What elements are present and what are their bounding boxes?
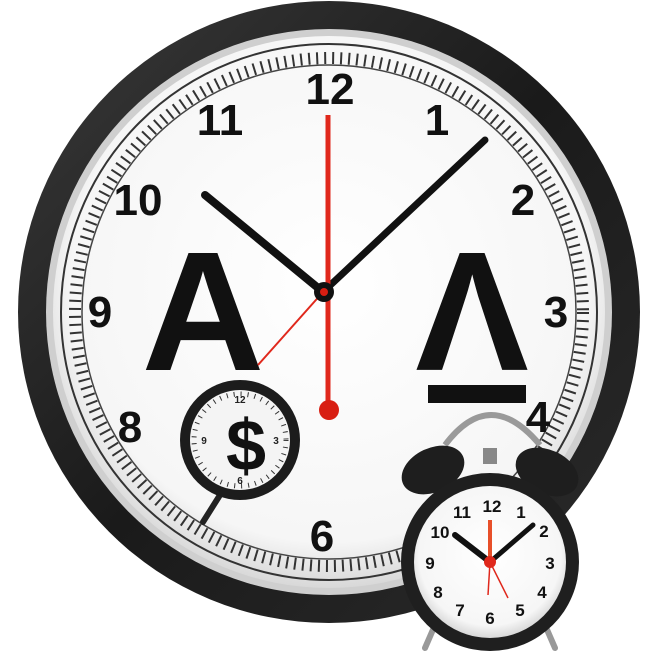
letter A: A bbox=[142, 217, 264, 407]
alarm clock bbox=[394, 415, 586, 651]
body bbox=[401, 473, 579, 651]
legs bbox=[425, 625, 435, 648]
alarm clock: 9 bbox=[425, 554, 435, 573]
small dollar clock: 6 bbox=[237, 476, 243, 487]
hour numerals bbox=[88, 65, 568, 561]
hour numerals: 6 bbox=[310, 512, 334, 561]
alarm clock: 6 bbox=[485, 609, 495, 628]
dollar sign: $ bbox=[226, 406, 266, 486]
handle bbox=[203, 495, 220, 522]
alarm clock: 12 bbox=[483, 497, 501, 516]
minute hand bbox=[323, 140, 485, 292]
hour numerals: 10 bbox=[114, 176, 162, 225]
alarm clock: 5 bbox=[515, 601, 525, 620]
hour numerals: 3 bbox=[544, 288, 568, 337]
hour numerals: 11 bbox=[197, 96, 243, 145]
alarm clock: 10 bbox=[431, 523, 449, 542]
alarm clock: 3 bbox=[545, 554, 555, 573]
alarm clock: 1 bbox=[516, 503, 526, 522]
alarm clock: 4 bbox=[537, 583, 547, 602]
letter lambda with underline: Λ bbox=[415, 217, 529, 407]
hour numerals: 4 bbox=[526, 393, 551, 442]
hour numerals: 9 bbox=[88, 288, 112, 337]
clock face bbox=[53, 36, 605, 588]
alarm clock: 2 bbox=[539, 522, 549, 541]
hour numerals: 2 bbox=[511, 176, 535, 225]
hour hand bbox=[205, 195, 323, 292]
hour numerals: 12 bbox=[306, 65, 354, 114]
bells bbox=[394, 436, 472, 504]
alarm clock: 7 bbox=[455, 601, 465, 620]
handle arc bbox=[445, 415, 540, 445]
small dollar clock: 9 bbox=[201, 436, 207, 447]
small dollar clock bbox=[180, 380, 300, 522]
red second hand bbox=[258, 115, 339, 420]
small dollar clock: 3 bbox=[273, 436, 279, 447]
hour numerals: 8 bbox=[118, 403, 142, 452]
alarm clock: 8 bbox=[433, 583, 443, 602]
hour numerals: 1 bbox=[425, 96, 449, 145]
center pivot bbox=[314, 282, 334, 302]
alarm clock: 11 bbox=[453, 503, 471, 522]
small dollar clock: 12 bbox=[234, 395, 246, 406]
